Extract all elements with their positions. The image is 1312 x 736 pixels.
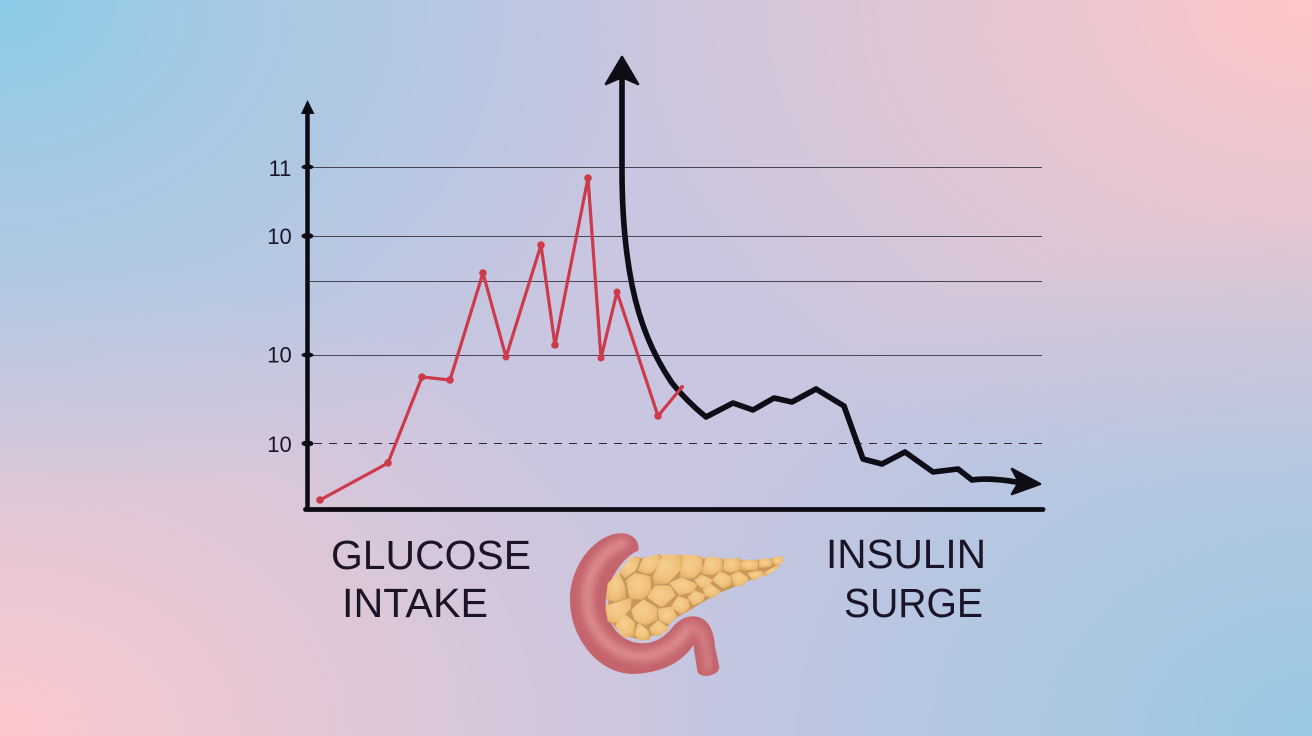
label: glucose intake: GLUCOSE <box>331 532 531 578</box>
y axis with arrowhead <box>301 100 314 511</box>
y axis labels: 10 <box>267 432 292 457</box>
label: glucose intake <box>331 532 531 626</box>
label: insulin surge <box>826 531 986 626</box>
glucose curve <box>316 174 684 504</box>
insulin curve with arrows <box>606 57 1040 494</box>
y axis labels: 10 <box>267 224 292 249</box>
label: insulin surge: INSULIN <box>826 531 986 577</box>
chart: glucose and insulin curves <box>267 57 1043 511</box>
y axis labels: 11 <box>269 156 291 181</box>
label: glucose intake: INTAKE <box>342 580 488 626</box>
duodenum tube <box>570 533 719 676</box>
icon: pancreas <box>570 533 782 676</box>
y axis labels: 10 <box>267 342 292 368</box>
x axis <box>306 507 1043 512</box>
y axis labels <box>267 156 292 457</box>
label: insulin surge: SURGE <box>844 580 983 626</box>
gland body <box>607 555 782 639</box>
